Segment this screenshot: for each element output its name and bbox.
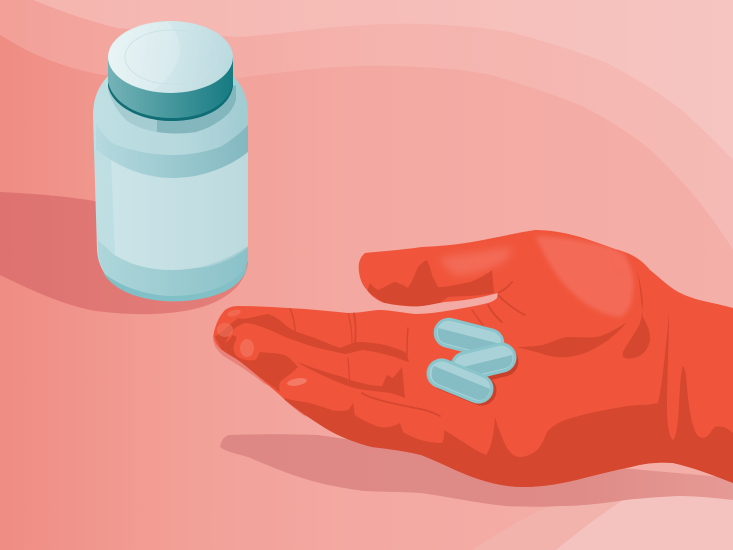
wrist crease blob <box>623 270 650 358</box>
fingertip under-shadow <box>213 335 306 417</box>
background wave: top light band <box>33 0 733 160</box>
hand silhouette <box>214 230 733 487</box>
knuckle highlight <box>613 253 627 271</box>
bottle base tint <box>98 240 248 300</box>
palm finger shade <box>298 362 405 398</box>
background wave: middle band <box>0 0 733 250</box>
pill: middle <box>447 339 520 385</box>
lower hand shade <box>280 313 733 500</box>
cap lower edge <box>108 82 233 121</box>
palm crease <box>517 322 627 357</box>
pills in palm <box>422 315 522 410</box>
pill bottle <box>93 21 248 301</box>
pill shadow: bottom <box>425 356 501 410</box>
finger lines <box>290 282 525 416</box>
palm highlight <box>536 236 633 317</box>
background wave: bottom right light band <box>556 490 733 550</box>
cap inner ring <box>125 30 217 84</box>
bottle base rim <box>103 266 247 301</box>
hand shadow <box>220 434 733 507</box>
pill: top <box>430 315 508 361</box>
hand <box>213 230 733 500</box>
pill shadow: middle <box>449 343 522 388</box>
pill: bottom <box>422 354 498 408</box>
bottle body <box>93 76 248 300</box>
background wave: bottom right outer band <box>472 490 733 550</box>
cap top <box>108 21 233 93</box>
middle finger shade <box>215 335 298 392</box>
bottle label <box>111 152 248 270</box>
fingertip highlights <box>217 308 254 357</box>
cap side <box>108 57 233 120</box>
thumb shade <box>367 260 494 307</box>
ring finger pad <box>280 373 353 411</box>
bottle shadow <box>0 192 248 314</box>
index finger shade <box>215 314 409 362</box>
neck shadow <box>108 85 236 134</box>
thumb highlight <box>440 247 512 275</box>
shoulder band <box>96 123 248 178</box>
cap highlight <box>108 22 180 90</box>
